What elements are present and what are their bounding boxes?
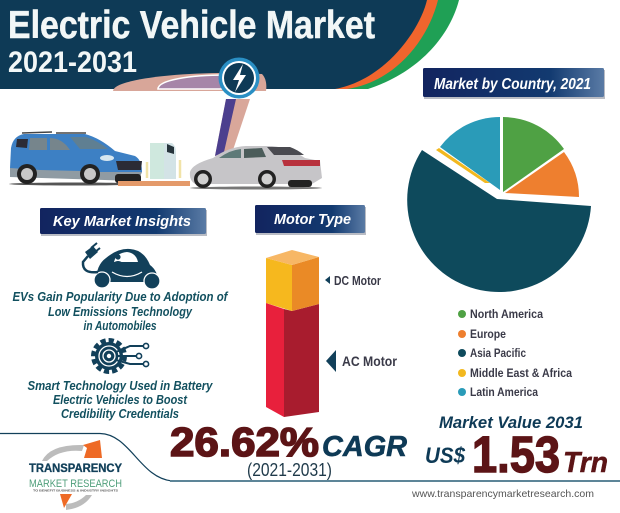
legend [458, 307, 572, 399]
heading banner: Key Market Insights: Key Market Insights [53, 213, 191, 230]
logo: Transparency Market Research: MARKET RESEARCH [29, 478, 122, 490]
legend item: Middle East & Africa: Middle East & Africa [470, 366, 572, 380]
stat: CAGR: 26.62% [170, 419, 319, 465]
heading banner: Motor Type: Motor Type [274, 211, 351, 228]
divider line [0, 434, 620, 481]
text: smart technology insight: Smart Technology Used in Battery [28, 379, 213, 393]
legend item: Asia Pacific: Asia Pacific [470, 346, 526, 360]
stat: market value 2031: US$ [425, 443, 466, 468]
pie chart: market by country [407, 117, 591, 292]
heading banner: Key Market Insights [40, 208, 207, 236]
heading banner: Market by Country [423, 68, 605, 99]
stat: market value 2031: Market Value 2031 [439, 413, 583, 432]
legend item: Latin America: Latin America [470, 385, 538, 399]
label: AC Motor [326, 350, 397, 372]
stat: CAGR [170, 419, 407, 480]
text: EV popularity insight: EVs Gain Popularity Due to Adoption of [12, 290, 229, 304]
stat: market value 2031: 1.53 [472, 426, 560, 483]
heading banner: Market by Country: Market by Country, 2021 [434, 76, 591, 93]
logo arrows [42, 440, 102, 510]
text: EV popularity insight [12, 290, 229, 333]
stat: CAGR: CAGR [322, 431, 407, 463]
text: EV popularity insight: Low Emissions Technology [48, 305, 193, 319]
text: smart technology insight [28, 379, 213, 421]
website url: www.transparencymarketresearch.com [411, 488, 594, 500]
text: smart technology insight: Electric Vehicles to Boost [53, 393, 188, 407]
slice: Asia Pacific [407, 150, 591, 292]
bar segment: AC motor [266, 303, 319, 417]
heading banner: Motor Type [255, 205, 366, 235]
icon: lightning logo [218, 58, 260, 98]
label: DC Motor: DC Motor [334, 274, 381, 288]
stacked bar: motor type [266, 250, 319, 417]
logo: Transparency Market Research [29, 440, 122, 510]
logo: Transparency Market Research: TO BENEFIT BUSINESS & INDUSTRY INSIGHTS [33, 488, 118, 492]
title: Electric Vehicle Market [8, 4, 375, 47]
legend item: Europe: Europe [470, 327, 506, 341]
header band with curved edge [0, 0, 459, 89]
stat: market value 2031 [425, 413, 608, 483]
text: EV popularity insight: in Automobiles [84, 319, 157, 333]
illustration: charger unit [118, 143, 190, 186]
label: AC Motor: AC Motor [342, 353, 397, 369]
legend item: North America: North America [470, 307, 543, 321]
bar segment: DC motor [266, 250, 319, 311]
stat: CAGR: (2021-2031) [247, 460, 332, 480]
text: smart technology insight: Credibility Credentials [61, 407, 179, 421]
slice: Europe [505, 152, 579, 197]
stat: market value 2031: Trn [563, 447, 608, 479]
slice: North America [503, 117, 564, 192]
slice: Latin America [440, 117, 500, 190]
slice: Middle East & Africa [436, 148, 490, 183]
logo: Transparency Market Research: TRANSPARENCY [29, 461, 122, 475]
icon: electric car with plug [83, 243, 160, 289]
illustration: silver sedan [190, 146, 322, 190]
illustration: blue SUV [9, 132, 142, 186]
charging station canopy and pole [113, 73, 266, 156]
icon: gear with circuit traces [94, 341, 149, 371]
subtitle years: 2021-2031 [8, 46, 137, 79]
